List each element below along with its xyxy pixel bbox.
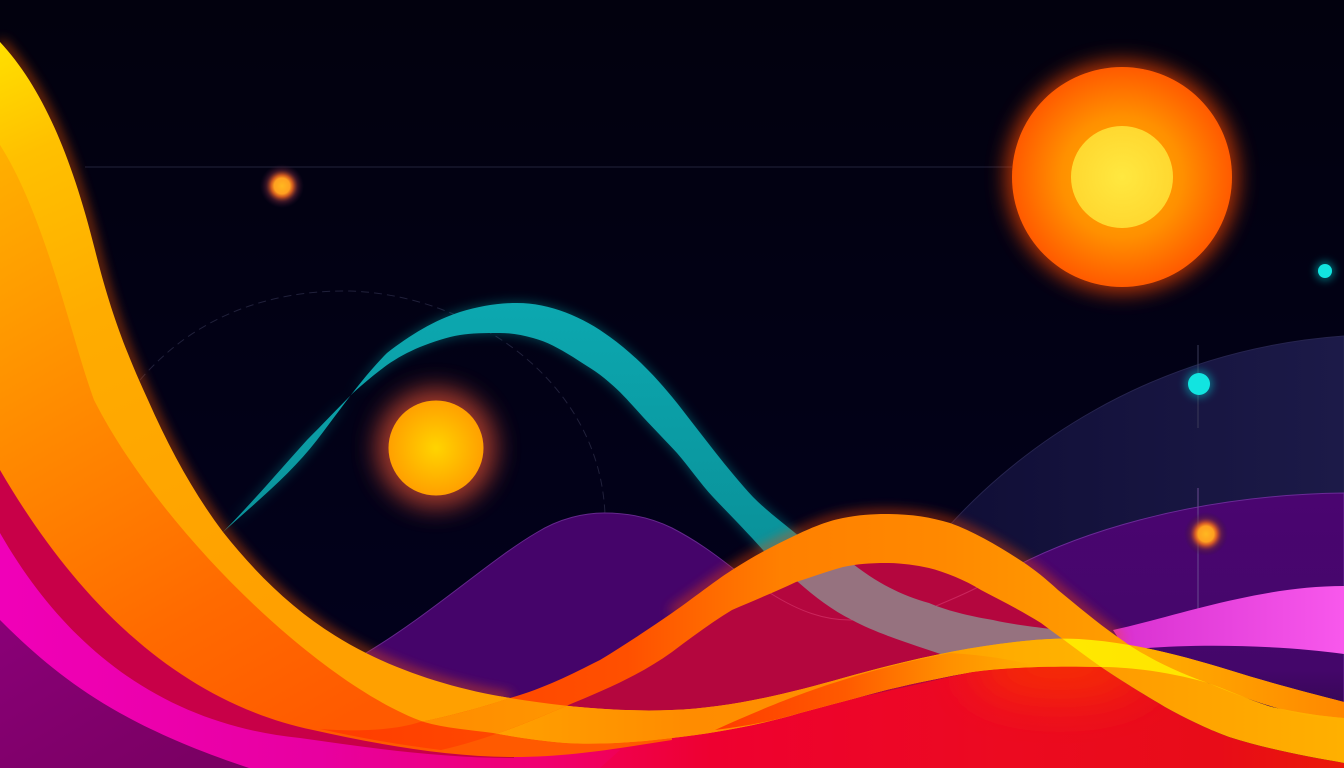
- ribbon and wave crossings: [422, 638, 1342, 734]
- orange wave: [320, 514, 1344, 763]
- teal ribbon: [222, 303, 810, 565]
- red base orange glow: [966, 666, 1144, 717]
- vertical guide line upper: [1197, 345, 1199, 428]
- middle orb: [376, 388, 496, 508]
- teal ribbon glow: [222, 303, 810, 565]
- horizontal guide line: [85, 166, 1012, 168]
- orange band: [0, 125, 672, 757]
- vertical guide line lower: [1197, 488, 1199, 610]
- dashed arc: [140, 291, 605, 515]
- navy hill: [930, 336, 1344, 700]
- small orange orb: [260, 164, 304, 208]
- center purple hill: [366, 513, 800, 700]
- right orange orb: [1184, 512, 1228, 556]
- main ribbon right section: [500, 638, 1344, 744]
- orange wedge under ribbon: [715, 653, 1040, 730]
- right purple hill: [1000, 493, 1344, 730]
- orange wave glow: [672, 514, 1122, 640]
- crimson band: [0, 460, 514, 758]
- grey translucent ribbon: [770, 560, 1080, 656]
- bottom-left purple wedge: [0, 610, 260, 768]
- crimson mid region: [556, 540, 1110, 730]
- large sun: [1006, 61, 1238, 293]
- red base wave: [500, 667, 1344, 768]
- cyan dot small: [1315, 261, 1335, 281]
- faint arcs on crimson: [770, 587, 978, 620]
- magenta band: [0, 525, 620, 768]
- cyan dot large: [1185, 370, 1213, 398]
- pink ribbon right: [1113, 586, 1344, 654]
- left ribbon edge glow: [0, 42, 510, 698]
